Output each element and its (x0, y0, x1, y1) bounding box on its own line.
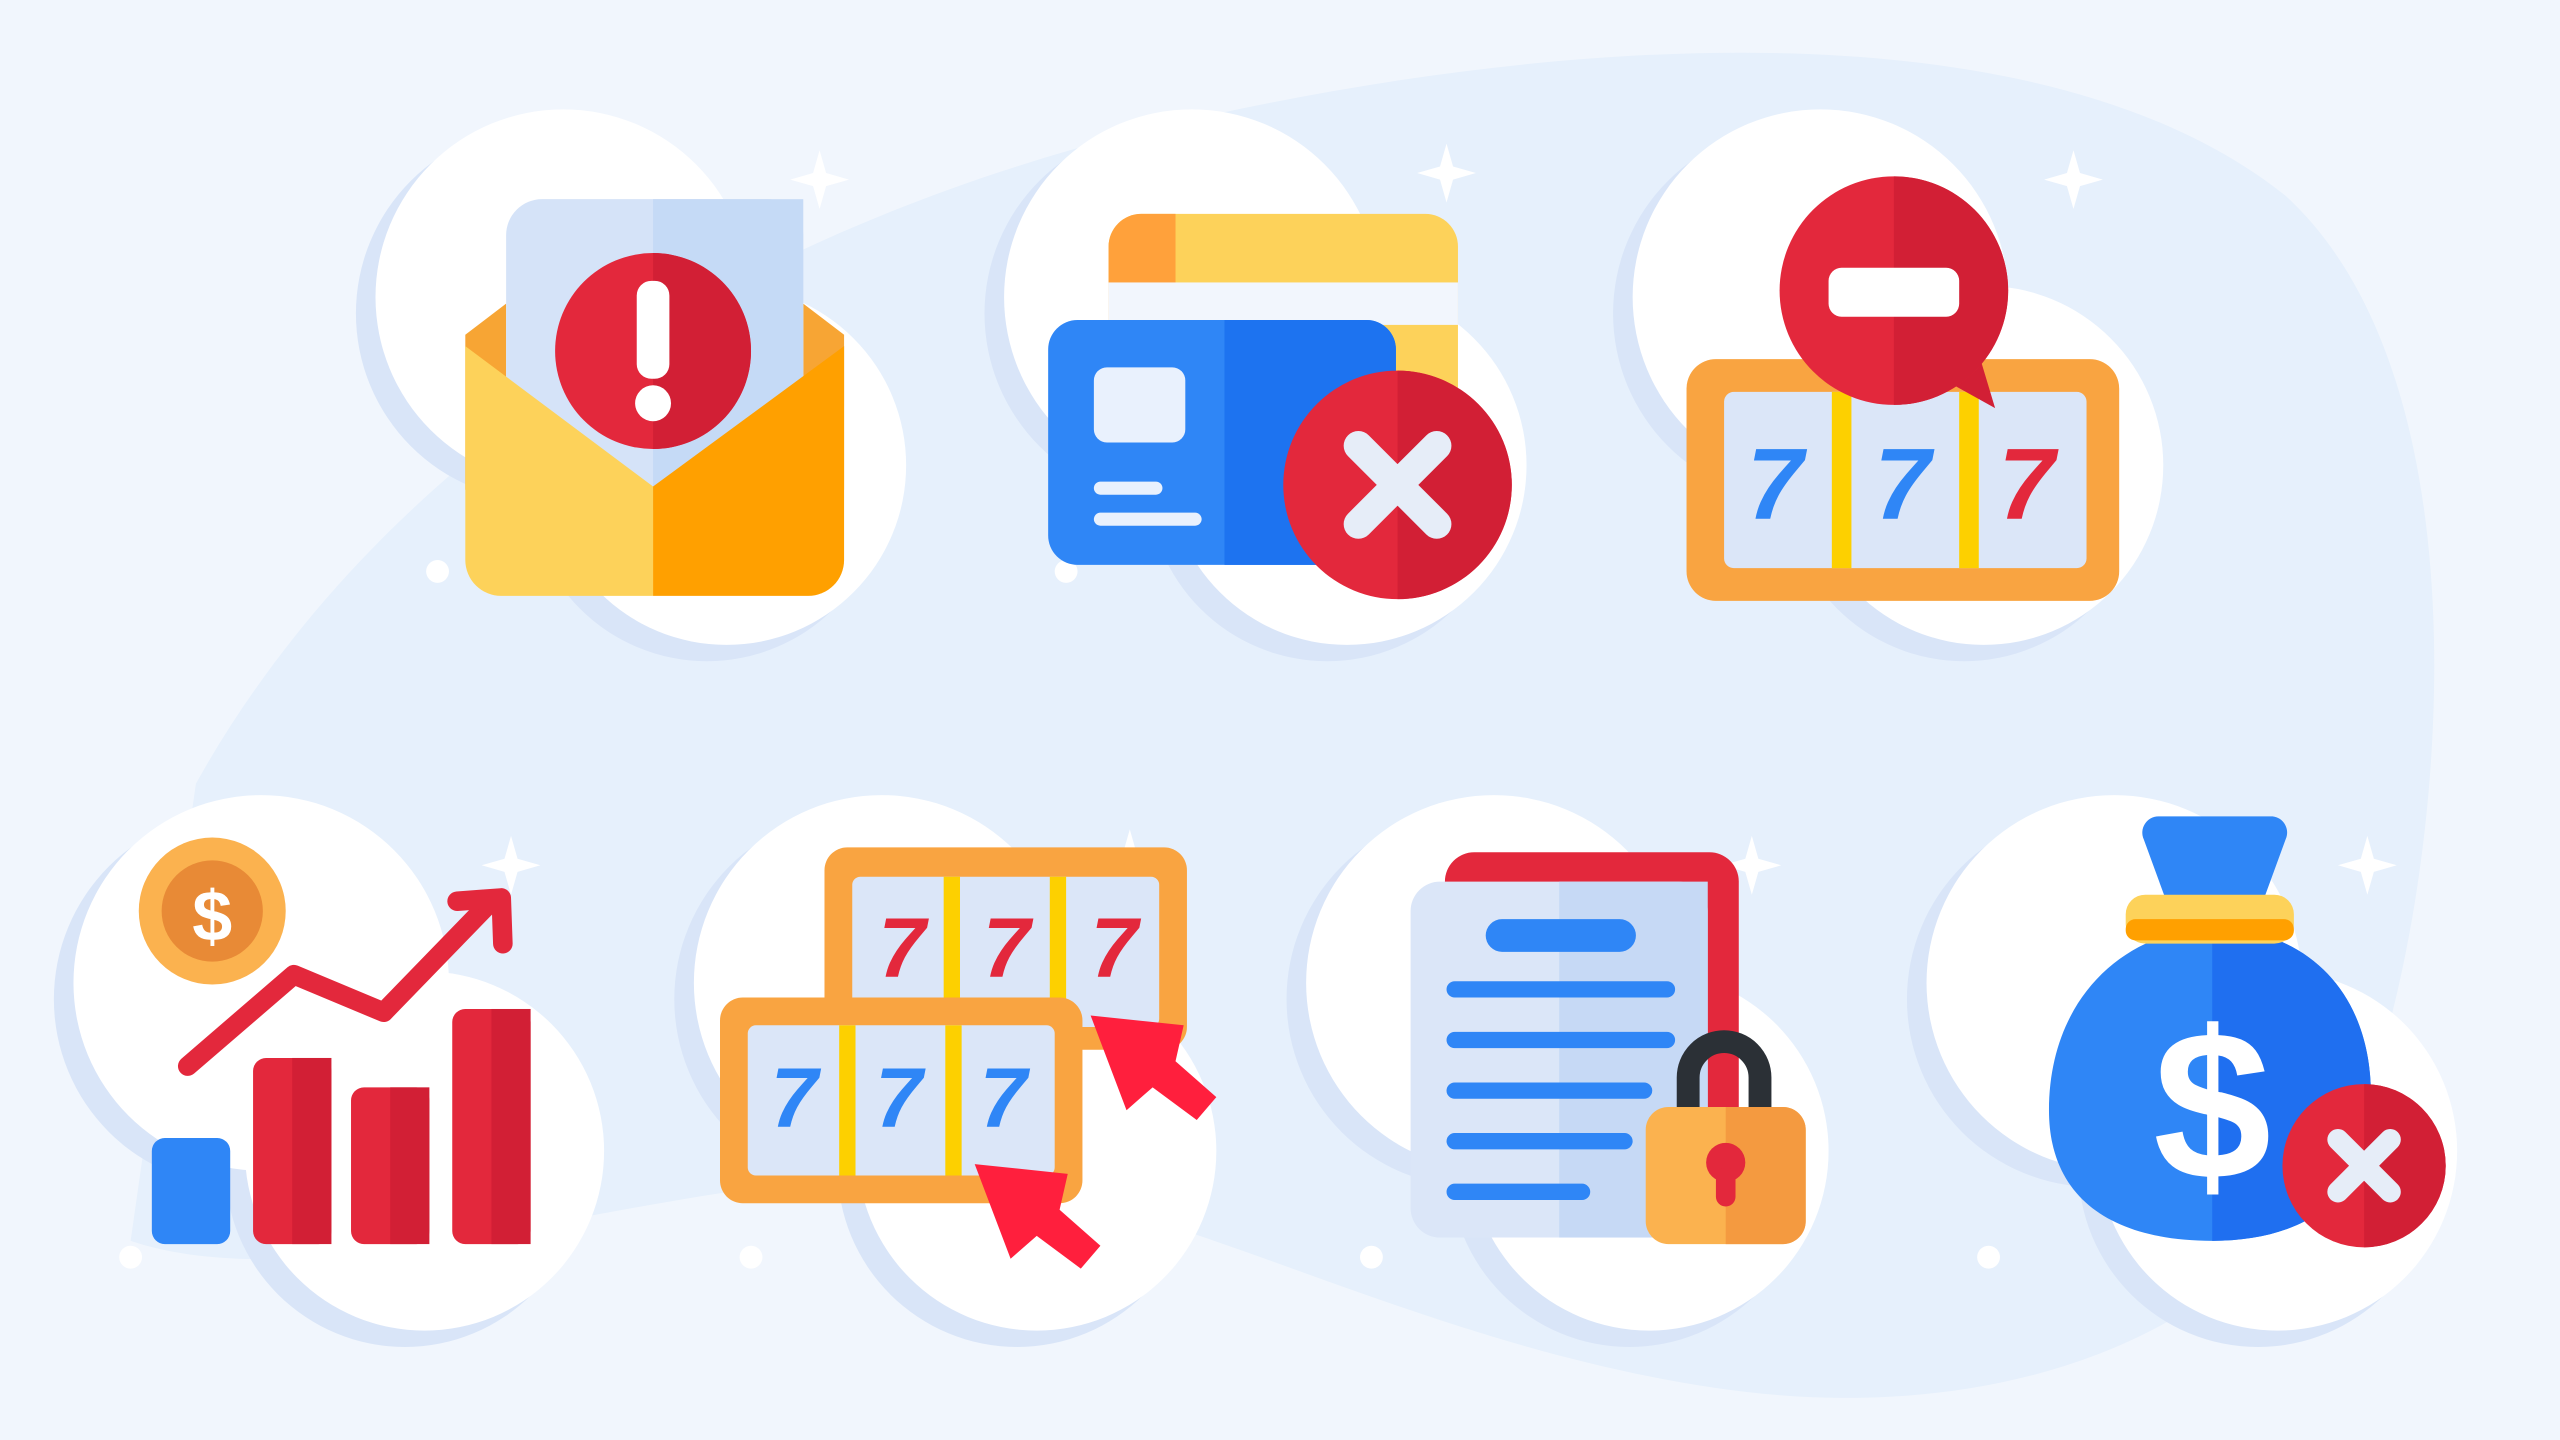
icon: slot machines with cursors: 7 (875, 1050, 926, 1145)
icon: rising chart with coin: $ (192, 876, 232, 956)
icon: blocked slot machine (1687, 176, 2119, 601)
icon: slot machines with cursors: 7 (878, 899, 929, 994)
icon: blocked slot machine: 7 (1874, 428, 1935, 541)
icon: rising chart with coin (139, 838, 531, 1244)
icon: slot machines with cursors (720, 847, 1216, 1269)
icon: blocked slot machine: 7 (1747, 428, 1808, 541)
sparkles (119, 144, 2397, 1269)
icon: slot machines with cursors: 7 (980, 1050, 1031, 1145)
icon: money bag with X: $ (2153, 987, 2271, 1224)
icon: money bag with X (2049, 816, 2446, 1247)
icon: warning envelope (465, 199, 844, 596)
icon: slot machines with cursors: 7 (983, 899, 1034, 994)
icon: slot machines with cursors: 7 (771, 1050, 822, 1145)
icon: declined cards (1048, 214, 1512, 599)
icon: blocked slot machine: 7 (1998, 428, 2059, 541)
icon: locked document (1411, 852, 1806, 1244)
icon: slot machines with cursors: 7 (1091, 899, 1142, 994)
